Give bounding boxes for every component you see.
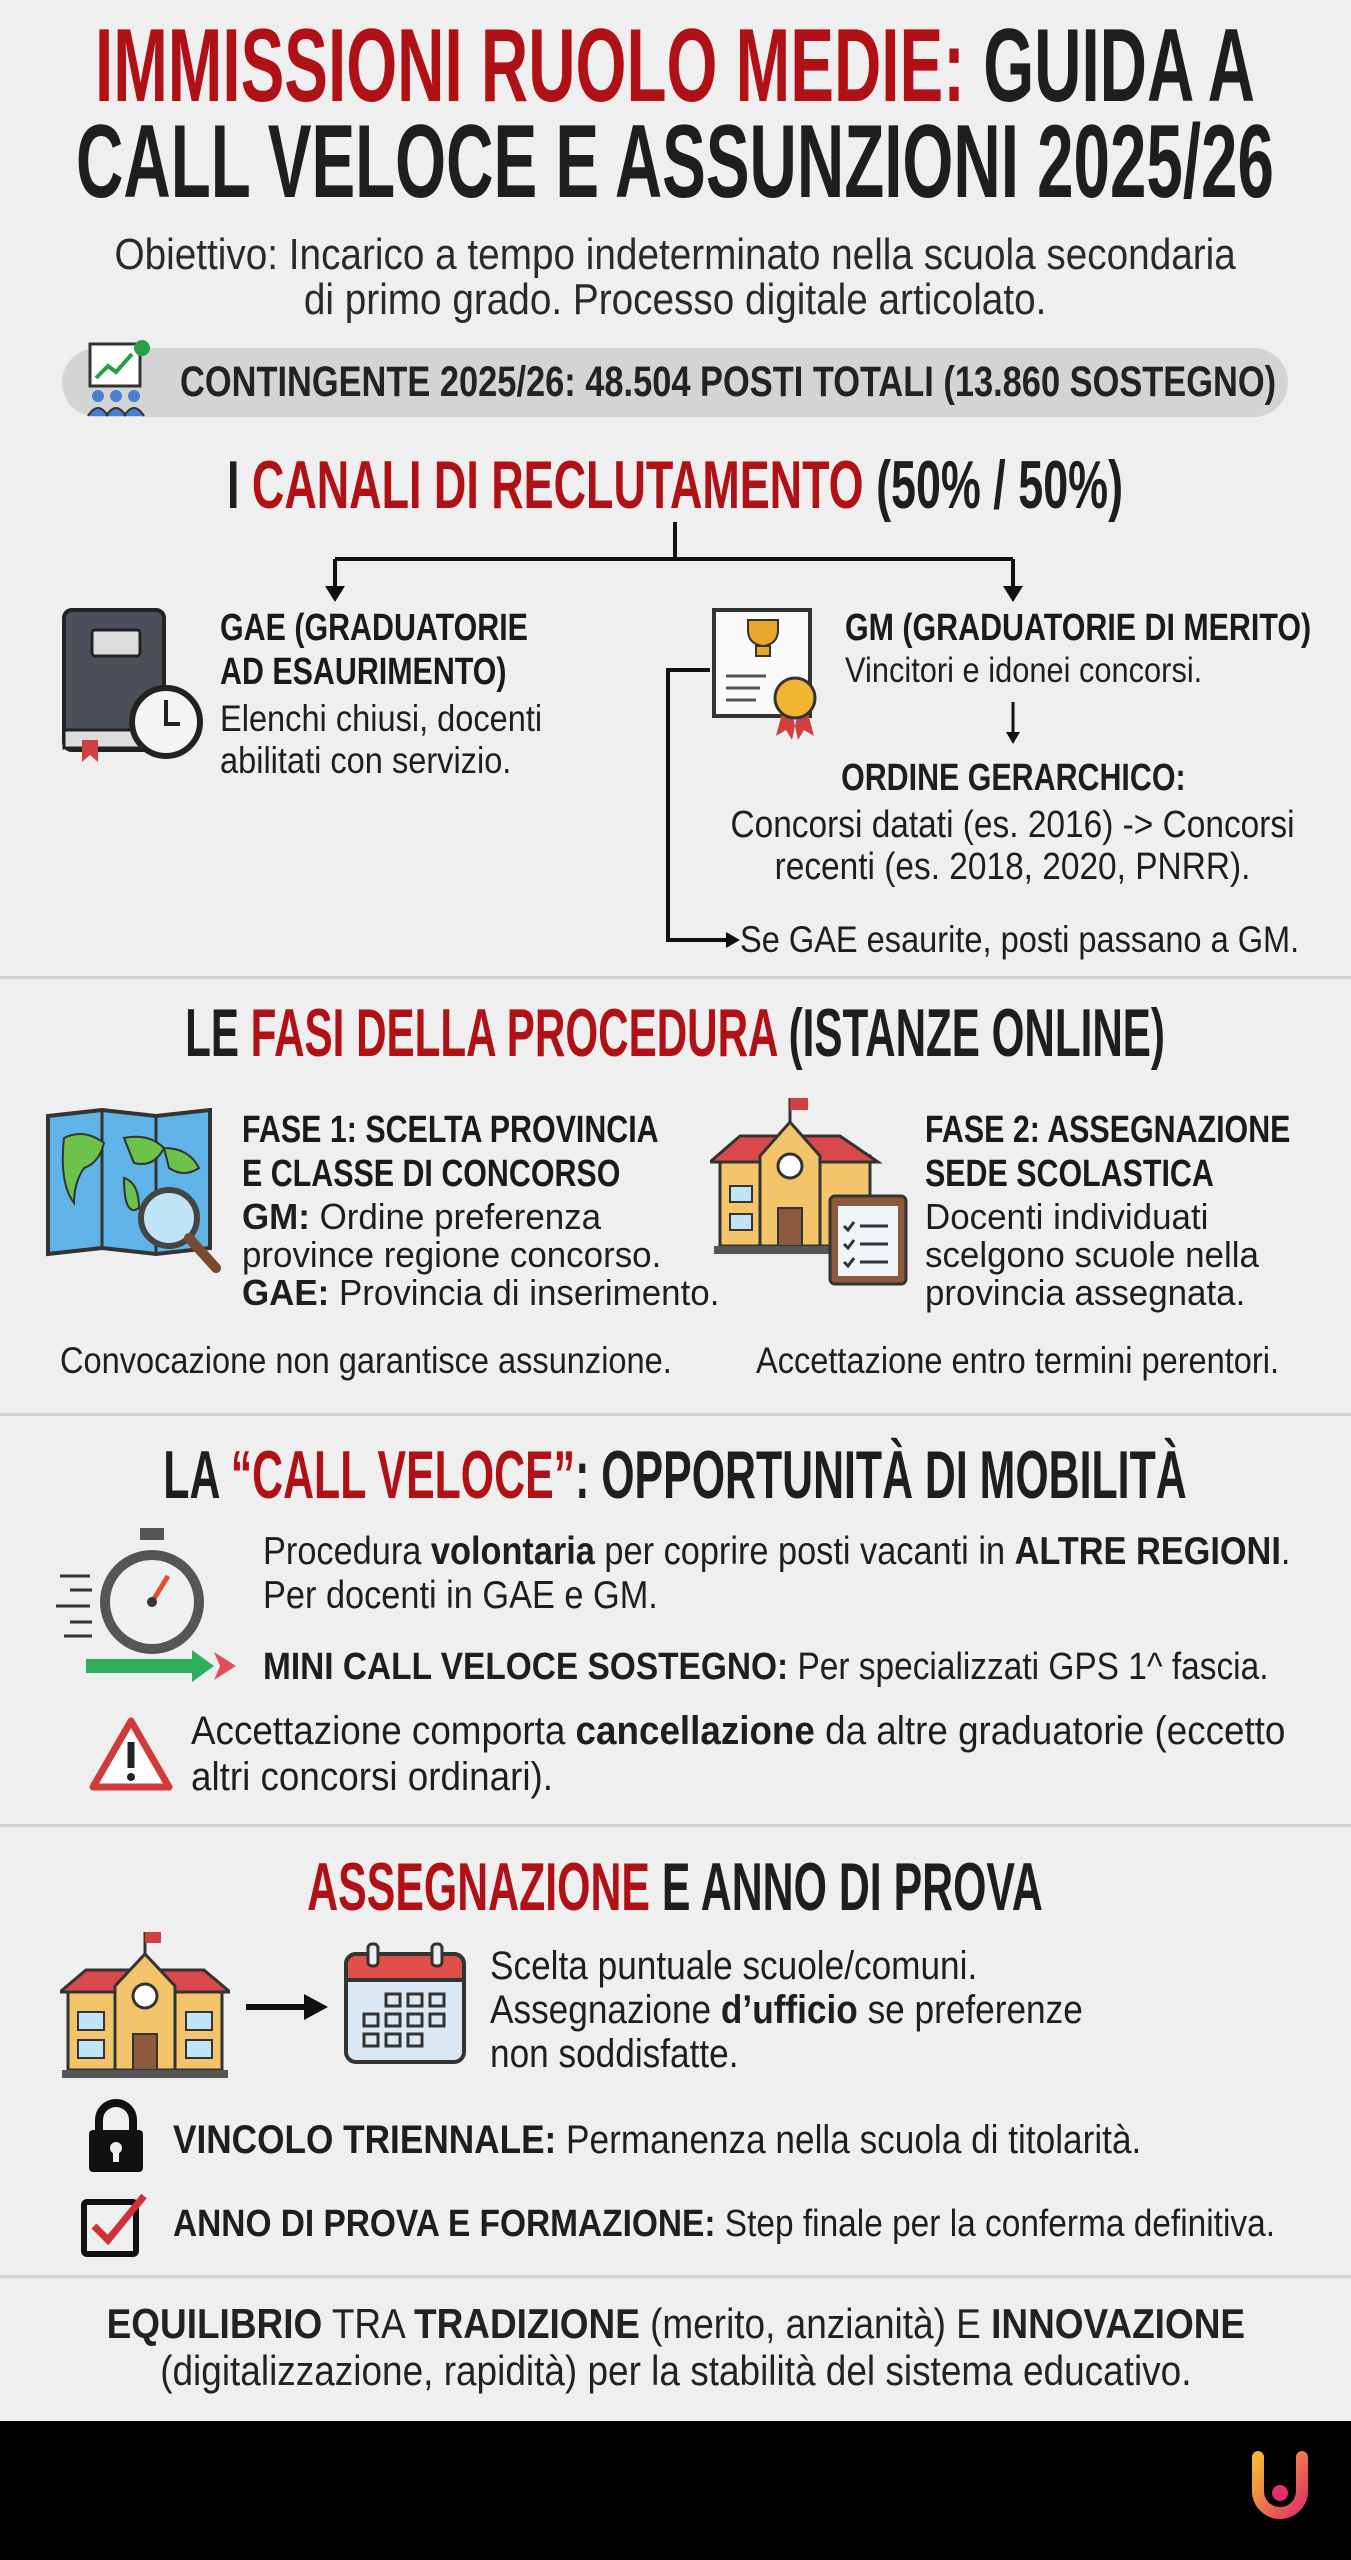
bracket arrow [666, 668, 740, 948]
fase 2 body: provincia assegnata. [925, 1272, 1245, 1313]
GAE title: GAE (GRADUATORIE [220, 607, 528, 649]
mini call: MINI CALL VELOCE SOSTEGNO: Per specializzati GPS 1^ fascia. [263, 1646, 1268, 1688]
icon: calendar [344, 1942, 466, 2064]
call veloce text: Procedura volontaria per coprire posti vacanti in ALTRE REGIONI. [263, 1530, 1290, 1573]
conclusion: EQUILIBRIO TRA TRADIZIONE (merito, anzianità) E INNOVAZIONE [106, 2300, 1245, 2347]
assegnazione text: non soddisfatte. [490, 2032, 739, 2076]
heading: fasi: LE FASI DELLA PROCEDURA (ISTANZE ONLINE) [185, 995, 1165, 1071]
arrow right [246, 1994, 328, 2020]
icon: lock [89, 2099, 143, 2172]
heading: assegnazione: ASSEGNAZIONE E ANNO DI PROVA [307, 1849, 1043, 1925]
footer band [0, 2421, 1351, 2560]
warning text: Accettazione comporta cancellazione da altre graduatorie (eccetto [191, 1709, 1285, 1753]
fase 2 title: FASE 2: ASSEGNAZIONE [925, 1109, 1290, 1151]
conclusion: (digitalizzazione, rapidità) per la stabilità del sistema educativo. [160, 2347, 1191, 2394]
GAE title [220, 607, 528, 693]
ordine gerarchico: Concorsi datati (es. 2016) -> Concorsi [731, 804, 1295, 846]
icon: book with clock [62, 608, 203, 762]
note: GAE esaurite: Se GAE esaurite, posti passano a GM. [740, 919, 1299, 960]
icon: map [46, 1108, 221, 1273]
fase 1 title: FASE 1: SCELTA PROVINCIA [242, 1109, 659, 1151]
tree arrows [325, 522, 1023, 602]
warning text [191, 1709, 1285, 1799]
panel: assegnazione [60, 1932, 1275, 2257]
icon: warning [90, 1718, 172, 1790]
panel: fase 1 [46, 1108, 719, 1313]
assegnazione text: Assegnazione d’ufficio se preferenze [490, 1988, 1083, 2032]
panel: fase 2 [710, 1098, 1290, 1313]
contingente text: CONTINGENTE 2025/26: 48.504 POSTI TOTALI (13.860 SOSTEGNO) [180, 358, 1276, 406]
GM title: GM (GRADUATORIE DI MERITO) [845, 607, 1311, 649]
conclusion [0, 2300, 1351, 2394]
GAE body: Elenchi chiusi, docenti [220, 698, 542, 739]
ordine gerarchico: ORDINE GERARCHICO: [841, 757, 1185, 799]
fase 1 body: province regione concorso. [242, 1234, 661, 1275]
fase 1 body: GAE: Provincia di inserimento. [242, 1272, 719, 1313]
panel: GM [712, 607, 1311, 888]
icon: school [60, 1932, 230, 2078]
fase 1 body [242, 1196, 719, 1313]
note: accettazione: Accettazione entro termini perentori. [756, 1340, 1279, 1381]
fase 2 title: SEDE SCOLASTICA [925, 1153, 1214, 1195]
title: CALL VELOCE E ASSUNZIONI 2025/26 [76, 104, 1274, 220]
warning text: altri concorsi ordinari). [191, 1755, 553, 1799]
fase 2 body: scelgono scuole nella [925, 1234, 1259, 1275]
heading: canali: I CANALI DI RECLUTAMENTO (50% / 50%) [227, 447, 1123, 523]
subtitle: di primo grado. Processo digitale articolato. [304, 275, 1047, 324]
panel: call veloce [56, 1528, 1290, 1799]
heading: call veloce: LA “CALL VELOCE”: OPPORTUNITÀ DI MOBILITÀ [163, 1437, 1187, 1513]
call veloce text [263, 1530, 1290, 1617]
fase 2 body: Docenti individuati [925, 1196, 1208, 1237]
assegnazione text: Scelta puntuale scuole/comuni. [490, 1944, 977, 1988]
fase 1 title: E CLASSE DI CONCORSO [242, 1153, 620, 1195]
note: convocazione: Convocazione non garantisce assunzione. [60, 1340, 672, 1381]
assegnazione text [490, 1944, 1083, 2076]
ordine gerarchico [731, 757, 1295, 888]
subtitle [115, 230, 1236, 324]
fase 2 body [925, 1196, 1259, 1313]
icon: chart people [87, 340, 150, 416]
GAE title: AD ESAURIMENTO) [220, 651, 507, 693]
fase 1 title [242, 1109, 659, 1195]
vincolo triennale: VINCOLO TRIENNALE: Permanenza nella scuola di titolarità. [173, 2118, 1141, 2162]
arrow down [1006, 702, 1020, 744]
icon: certificate [712, 608, 816, 740]
ordine gerarchico: recenti (es. 2018, 2020, PNRR). [775, 846, 1251, 888]
title: IMMISSIONI RUOLO MEDIE: GUIDA A [95, 8, 1255, 124]
fase 2 title [925, 1109, 1290, 1195]
anno di prova: ANNO DI PROVA E FORMAZIONE: Step finale per la conferma definitiva. [173, 2203, 1275, 2245]
icon: school with clipboard [710, 1098, 908, 1286]
GM body: Vincitori e idonei concorsi. [845, 651, 1202, 690]
GAE body: abilitati con servizio. [220, 740, 511, 781]
icon: checkbox [81, 2194, 147, 2257]
call veloce text: Per docenti in GAE e GM. [263, 1574, 658, 1617]
title [76, 8, 1274, 220]
GAE body [220, 698, 542, 781]
icon: stopwatch [56, 1528, 236, 1682]
contingente pill [62, 348, 1288, 417]
subtitle: Obiettivo: Incarico a tempo indeterminato nella scuola secondaria [115, 230, 1236, 279]
panel: GAE [62, 607, 542, 781]
icon: logo [1250, 2451, 1310, 2525]
fase 1 body: GM: Ordine preferenza [242, 1196, 601, 1237]
